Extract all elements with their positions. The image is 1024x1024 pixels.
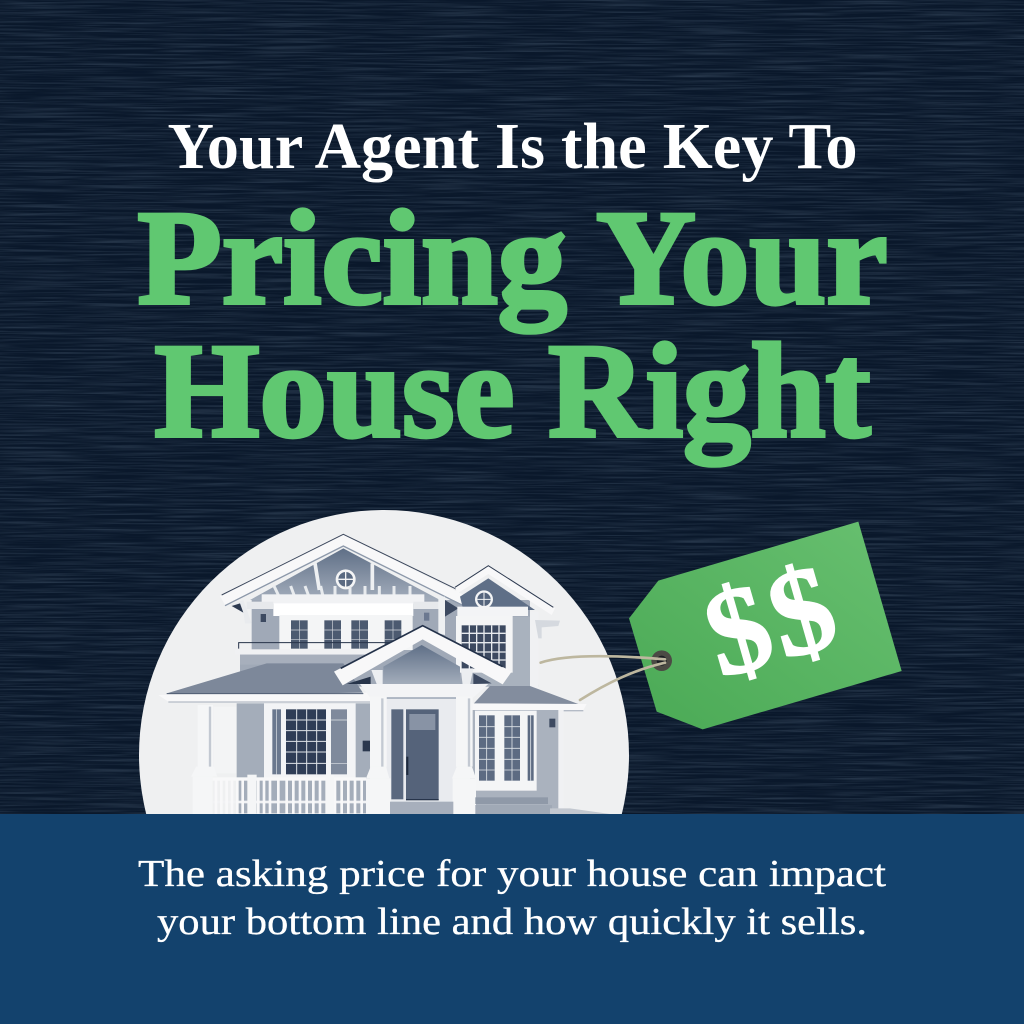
eyelet — [651, 650, 672, 671]
porch beam — [360, 684, 488, 687]
bay window — [264, 703, 356, 778]
entry door — [391, 709, 439, 800]
tag body — [629, 522, 902, 729]
right porch roof — [473, 686, 578, 704]
main porch roof left — [167, 663, 363, 693]
upper window band — [279, 615, 413, 650]
title: Pricing Your House Right — [138, 184, 887, 466]
title: Pricing Your House Right: Pricing Your — [138, 184, 887, 333]
subtitle: The asking price for your house can impact — [138, 853, 886, 895]
mailbox — [362, 740, 370, 752]
upper walls — [240, 600, 530, 687]
dollar signs: $ — [690, 556, 787, 704]
porch columns — [366, 697, 476, 814]
price tag — [541, 522, 902, 729]
porch railing — [213, 775, 366, 814]
gable braces — [315, 563, 372, 590]
rafter tails — [274, 586, 410, 595]
illustration: house in paper circle — [139, 510, 629, 814]
main gable wall — [250, 548, 440, 600]
subtitle — [138, 853, 886, 943]
eave brackets — [230, 600, 252, 623]
lower walls — [213, 707, 237, 773]
dollar signs: $ — [753, 537, 850, 686]
title: Pricing Your House Right: House Right — [154, 317, 871, 466]
paper circle — [139, 510, 629, 814]
round window — [336, 569, 356, 589]
front gable — [383, 645, 460, 678]
right gable wall — [460, 578, 535, 610]
title: Your Agent Is the Key To: Your Agent Is the Key To — [168, 110, 858, 183]
subtitle: your bottom line and how quickly it sells. — [157, 901, 867, 943]
wall lanterns — [261, 614, 266, 622]
footer band — [0, 814, 1024, 1024]
pergola — [262, 594, 424, 604]
balcony railing and deck — [239, 643, 397, 649]
string — [541, 656, 665, 700]
steps and walkway — [390, 797, 610, 815]
house — [158, 534, 610, 815]
main gable fascia — [220, 534, 466, 605]
right upper window — [462, 625, 506, 669]
dollar signs — [690, 537, 850, 704]
french doors — [475, 711, 537, 791]
